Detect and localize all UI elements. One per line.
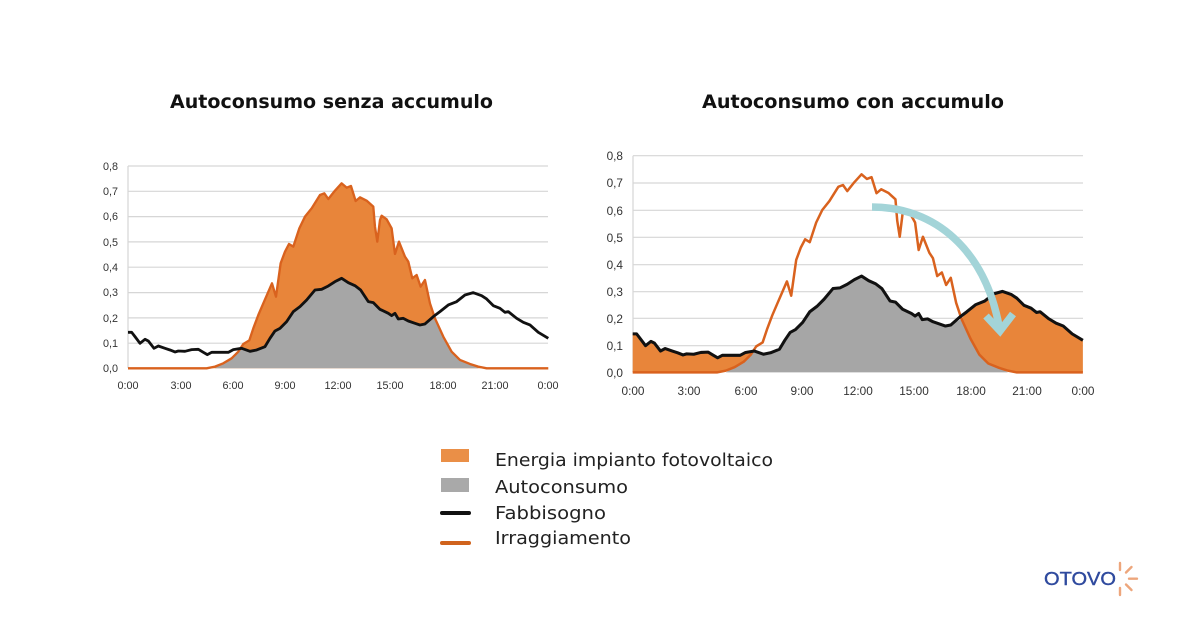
y axis labels: 0,7 — [607, 176, 623, 190]
legend label: self-consumption: Autoconsumo — [495, 478, 628, 498]
line: energy demand — [128, 278, 548, 355]
y axis labels: 0,8 — [607, 149, 623, 163]
area: stored energy used in the evening — [961, 291, 1083, 372]
y axis labels: 0,8 — [103, 161, 118, 173]
x axis labels: 3:00 — [170, 380, 192, 392]
y axis labels: 0,2 — [607, 312, 623, 326]
legend — [440, 449, 773, 549]
y axis labels: 0,0 — [607, 366, 623, 380]
legend label: demand: Fabbisogno — [495, 504, 606, 524]
x axis labels: 6:00 — [222, 380, 244, 392]
arrow: energy shifted from midday to evening — [872, 207, 1013, 331]
plotted curves — [633, 174, 1083, 372]
logo: Otovo — [1044, 563, 1137, 595]
title: left chart: Autoconsumo senza accumulo — [170, 91, 493, 113]
x axis labels: 18:00 — [956, 384, 986, 398]
x axis labels: 15:00 — [376, 380, 404, 392]
y axis labels: 0,6 — [607, 204, 623, 218]
x axis labels: 18:00 — [429, 380, 457, 392]
x axis labels: 0:00 — [622, 384, 645, 398]
x axis labels: 21:00 — [1012, 384, 1042, 398]
x axis labels: 0:00 — [1072, 384, 1095, 398]
area: self-consumption — [215, 278, 478, 368]
area: stored energy used in the morning — [633, 334, 754, 372]
legend swatch: irradiation — [440, 541, 471, 545]
legend swatch: self-consumption — [441, 478, 469, 492]
legend swatch: photovoltaic energy — [441, 449, 469, 462]
x axis labels — [622, 384, 1095, 398]
area: photovoltaic energy — [207, 183, 487, 368]
chart: self-consumption with storage — [607, 149, 1095, 398]
logo: Otovo: OTOVO — [1044, 568, 1116, 589]
x axis labels — [117, 380, 559, 392]
chart: self-consumption without storage — [103, 161, 559, 392]
x axis labels: 12:00 — [324, 380, 352, 392]
y axis labels: 0,7 — [103, 186, 118, 198]
y axis labels: 0,6 — [103, 211, 118, 223]
line: solar irradiation — [128, 183, 548, 368]
y axis labels: 0,3 — [103, 287, 118, 299]
x axis labels: 3:00 — [678, 384, 701, 398]
x axis labels: 0:00 — [537, 380, 559, 392]
x axis labels: 12:00 — [843, 384, 873, 398]
x axis labels: 9:00 — [274, 380, 296, 392]
y axis labels — [607, 149, 623, 380]
y axis labels: 0,1 — [607, 339, 623, 353]
x axis labels: 21:00 — [481, 380, 509, 392]
y axis labels: 0,5 — [607, 231, 623, 245]
line: solar irradiation — [633, 174, 1083, 372]
y axis labels: 0,3 — [607, 285, 623, 299]
x axis labels: 6:00 — [735, 384, 758, 398]
icon: sun rays — [1120, 563, 1137, 595]
y axis labels: 0,4 — [607, 258, 623, 272]
legend label: irradiation: Irraggiamento — [495, 529, 631, 549]
x axis labels: 15:00 — [899, 384, 929, 398]
legend label: photovoltaic energy: Energia impianto fotovoltaico — [495, 451, 773, 471]
y axis labels — [103, 161, 118, 375]
y axis labels: 0,2 — [103, 313, 118, 325]
area: self-consumption — [726, 276, 1008, 372]
x axis labels: 0:00 — [117, 380, 139, 392]
y axis labels: 0,0 — [103, 363, 118, 375]
y axis labels: 0,5 — [103, 237, 118, 249]
plotted curves — [128, 183, 548, 368]
title: right chart: Autoconsumo con accumulo — [702, 91, 1004, 113]
y axis labels: 0,1 — [103, 338, 118, 350]
line: energy demand — [633, 276, 1083, 358]
x axis labels: 9:00 — [791, 384, 814, 398]
y axis labels: 0,4 — [103, 262, 118, 274]
legend swatch: demand — [440, 511, 471, 515]
